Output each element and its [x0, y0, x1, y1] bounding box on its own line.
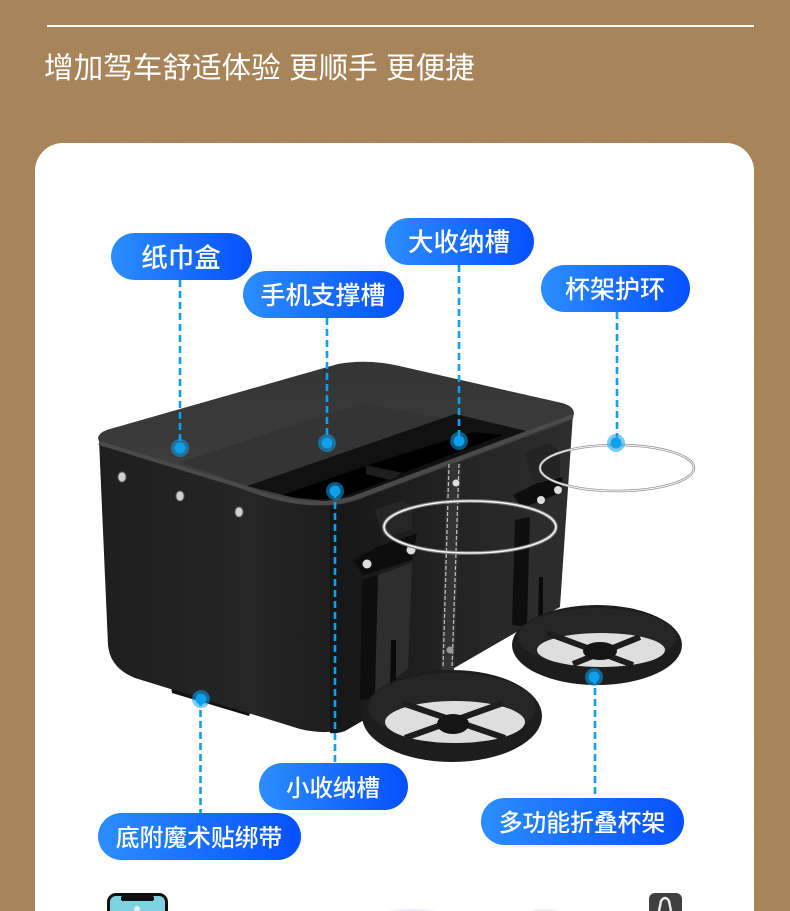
label: velcro strap — [98, 813, 301, 860]
label: phone slot: 手机支撑槽 — [260, 282, 386, 310]
label: foldable cup holder — [481, 798, 684, 845]
product: car storage box — [98, 362, 694, 762]
small compartment — [282, 466, 403, 499]
icon: clip accessory (cropped) — [649, 893, 682, 911]
rear cup holder — [512, 443, 694, 685]
velcro strap — [170, 680, 253, 716]
box left face — [99, 440, 350, 732]
label: tissue box — [111, 233, 252, 280]
title: 增加驾车舒适体验 更顺手 更便捷 — [44, 52, 475, 85]
label: velcro strap: 底附魔术贴绑带 — [116, 825, 282, 852]
front cup holder — [353, 500, 556, 762]
screws — [118, 472, 243, 517]
label: foldable cup holder: 多功能折叠杯架 — [499, 810, 665, 837]
box inner wall — [98, 362, 574, 505]
compartment divider — [366, 466, 403, 480]
label: tissue box: 纸巾盒 — [141, 243, 221, 273]
stitched leather strap — [441, 463, 461, 670]
box front rim — [99, 416, 573, 503]
panel: white product card — [35, 143, 754, 911]
callout markers — [171, 432, 625, 708]
label: cup holder ring: 杯架护环 — [565, 276, 665, 304]
box right face — [330, 414, 573, 733]
tray floor — [180, 403, 470, 486]
label: phone slot — [243, 271, 404, 318]
heading rule — [47, 25, 754, 27]
large compartment — [368, 432, 503, 473]
faint accessory tops — [388, 909, 559, 911]
label: cup holder ring — [541, 265, 690, 312]
callout lines — [180, 265, 617, 813]
label: small compartment: 小收纳槽 — [286, 775, 380, 801]
icon: phone (cropped) — [107, 893, 168, 911]
compartment block — [247, 414, 526, 501]
label: large compartment — [385, 218, 534, 265]
label: large compartment: 大收纳槽 — [408, 229, 510, 257]
label: small compartment — [259, 763, 408, 810]
